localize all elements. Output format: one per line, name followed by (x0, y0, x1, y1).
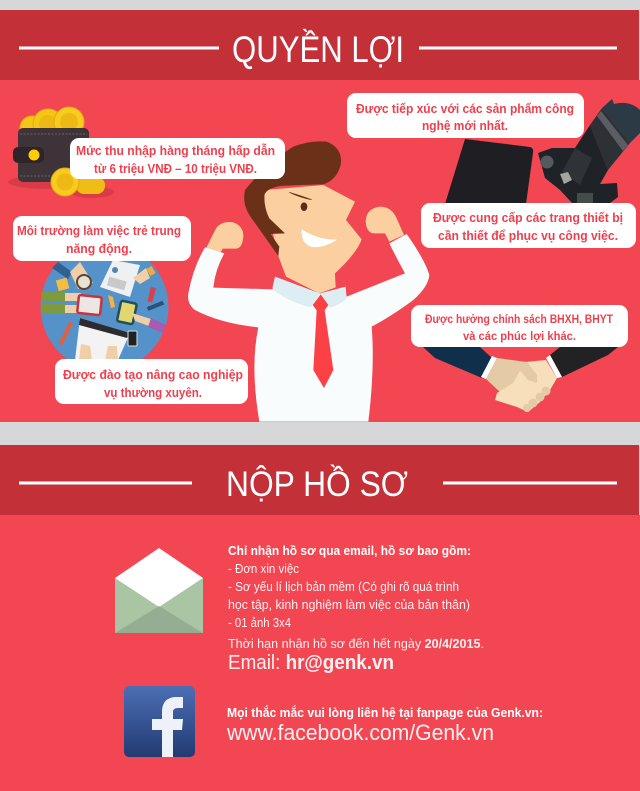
text block: application requirements: Email: hr@genk.vn (228, 652, 394, 674)
shirt (188, 234, 429, 422)
neck and face (264, 185, 362, 293)
bubble: environment (13, 216, 191, 261)
right fist (366, 207, 404, 242)
panel: nộp hồ sơ application (0, 445, 640, 791)
header band: nộp hồ sơ (0, 445, 639, 515)
icon: handshake (423, 347, 618, 412)
icon: facebook (124, 686, 195, 757)
bubble: environment: Môi trường làm việc trẻ trung (17, 223, 181, 238)
text block: application requirements (228, 543, 484, 674)
text block: facebook contact (226, 705, 543, 745)
bubble: income (70, 138, 285, 179)
icon: camera (538, 99, 640, 203)
icon: wallet with coins (8, 107, 114, 198)
bubble: equipment: Được cung cấp các trang thiết bị (433, 210, 623, 225)
icon: team working on devices (40, 243, 168, 371)
bubble: insurance and welfare: và các phúc lợi khác. (463, 329, 576, 343)
hair (244, 141, 341, 256)
text block: application requirements: học tập, kinh nghiệm làm việc của bản thân) (228, 597, 470, 612)
tie (313, 294, 333, 388)
title: nộp hồ sơ: NỘP HỒ SƠ (226, 464, 408, 504)
text block: application requirements: - Sơ yếu lí lịch bản mềm (Có ghi rõ quá trình (228, 579, 459, 594)
panel: quyền lợi benefits (0, 10, 640, 422)
text block: application requirements: - 01 ảnh 3x4 (228, 615, 291, 630)
icon: tablet (445, 139, 533, 204)
bubble: new tech products (347, 93, 584, 138)
bubble: training: vụ thường xuyên. (104, 385, 202, 400)
left fist (206, 222, 243, 253)
header band: quyền lợi (0, 10, 639, 80)
eye (301, 202, 307, 211)
bubble: training: Được đào tạo nâng cao nghiệp (63, 367, 243, 382)
bubble: new tech products: nghệ mới nhất. (422, 118, 508, 133)
bubble: income: Mức thu nhập hàng tháng hấp dẫn (76, 143, 275, 158)
smile (302, 229, 338, 247)
collar (272, 277, 347, 308)
bubble: equipment (421, 203, 636, 248)
icon: envelope (115, 548, 203, 633)
text block: facebook contact: Mọi thắc mắc vui lòng liên hệ tại fanpage của Genk.vn: (227, 705, 543, 720)
text block: application requirements: - Đơn xin việc (228, 561, 299, 576)
character: cheering office worker (188, 141, 429, 422)
text block: application requirements: Thời hạn nhận hồ sơ đến hết ngày 20/4/2015. (228, 636, 484, 651)
bubble: environment: năng động. (66, 241, 132, 256)
bubble: training (55, 359, 248, 404)
bubble: income: từ 6 triệu VNĐ – 10 triệu VNĐ. (94, 161, 257, 176)
bubble: equipment: cần thiết để phục vụ công việc. (438, 228, 618, 243)
text block: facebook contact: www.facebook.com/Genk.vn (226, 720, 494, 745)
bubble: insurance and welfare (411, 305, 628, 347)
title: quyền lợi: QUYỀN LỢI (232, 29, 404, 70)
text block: application requirements: Chỉ nhận hồ sơ qua email, hồ sơ bao gồm: (228, 543, 471, 558)
bubble: insurance and welfare: Được hưởng chính sách BHXH, BHYT (425, 312, 614, 326)
bubble: new tech products: Được tiếp xúc với các sản phẩm công (356, 101, 574, 116)
eyebrow (289, 192, 312, 200)
